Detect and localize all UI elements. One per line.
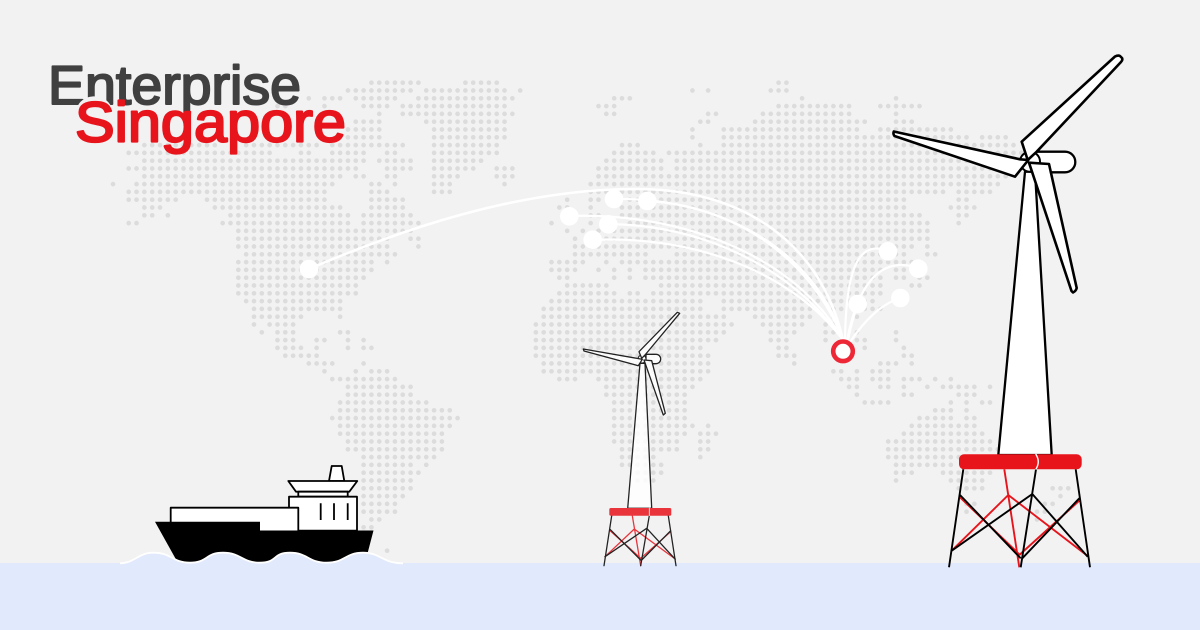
Singapore hub marker [833, 342, 853, 361]
large turbine jacket foundation [949, 469, 1090, 567]
large turbine tower [998, 172, 1052, 455]
small turbine platform [609, 508, 671, 516]
ship hull [155, 522, 374, 563]
ship neck [298, 492, 348, 497]
logo word: Enterprise: Enterprise [48, 54, 301, 116]
ship cargo deck [171, 508, 298, 532]
ship superstructure [289, 497, 357, 531]
small turbine nacelle [646, 354, 661, 364]
large offshore wind turbine [893, 56, 1122, 567]
route nodes [300, 190, 928, 313]
large turbine platform [959, 454, 1082, 469]
waves [120, 553, 403, 563]
logo word gap above the S [79, 99, 109, 110]
large turbine blades [893, 56, 1122, 292]
logo: Enterprise Singapore [48, 54, 346, 154]
dotted world map [113, 83, 1069, 551]
ship bridge [288, 481, 357, 492]
large turbine nacelle [1036, 152, 1075, 172]
small turbine blades [583, 312, 680, 415]
small turbine jacket foundation [604, 516, 676, 566]
route lines [309, 189, 918, 342]
small turbine hub [638, 355, 646, 363]
small turbine tower [628, 363, 652, 508]
cargo ship [120, 466, 403, 563]
small offshore wind turbine [583, 312, 680, 566]
logo word: Singapore: Singapore [75, 90, 346, 154]
trade route network [300, 189, 928, 361]
ship funnel [329, 466, 344, 481]
large turbine hub [1020, 152, 1040, 172]
sea [0, 563, 1200, 630]
